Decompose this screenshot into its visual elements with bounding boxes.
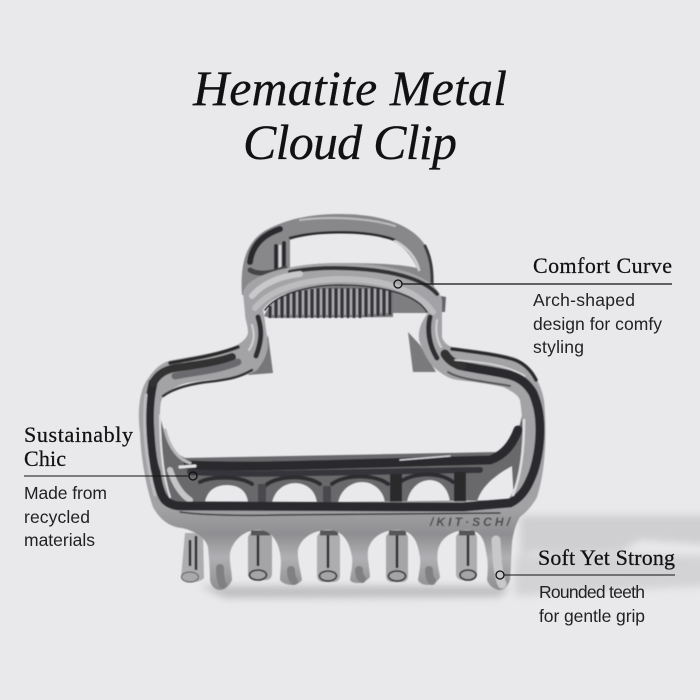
callout: Sustainably Chic: materials [24, 530, 95, 550]
title: Cloud Clip [243, 114, 457, 170]
title: Hematite Metal [192, 60, 507, 116]
clip: coil spring [264, 286, 428, 318]
callout: Sustainably Chic: Sustainably [24, 422, 133, 447]
clip illustration [139, 214, 546, 590]
clip: metallic reflections [145, 268, 540, 585]
callout: Comfort Curve: Arch-shaped [533, 290, 635, 310]
callout: Sustainably Chic: Chic [24, 446, 66, 471]
callout: Sustainably Chic: Made from [24, 483, 107, 503]
clip: back arch [242, 214, 434, 295]
callout: Comfort Curve: Comfort Curve [533, 253, 672, 278]
clip: brand engraving: /KIT·SCH/ [429, 515, 512, 529]
clip: hinge tabs [248, 296, 446, 375]
callout: Soft Yet Strong: for gentle grip [539, 606, 645, 626]
callout: Soft Yet Strong [496, 545, 675, 626]
callout: Comfort Curve: styling [533, 337, 584, 357]
cast shadow [200, 515, 700, 598]
title [192, 60, 507, 170]
clip: front frame [139, 263, 546, 590]
clip: inner bar with holes [160, 410, 525, 504]
callout: Soft Yet Strong: Rounded teeth [539, 582, 645, 602]
callout: Comfort Curve: design for comfy [533, 314, 662, 334]
clip: rear teeth [181, 532, 477, 582]
callout: Sustainably Chic: recycled [24, 507, 90, 527]
callout: Sustainably Chic [24, 422, 197, 550]
callout: Soft Yet Strong: Soft Yet Strong [538, 545, 675, 570]
callout: Comfort Curve [394, 253, 672, 357]
